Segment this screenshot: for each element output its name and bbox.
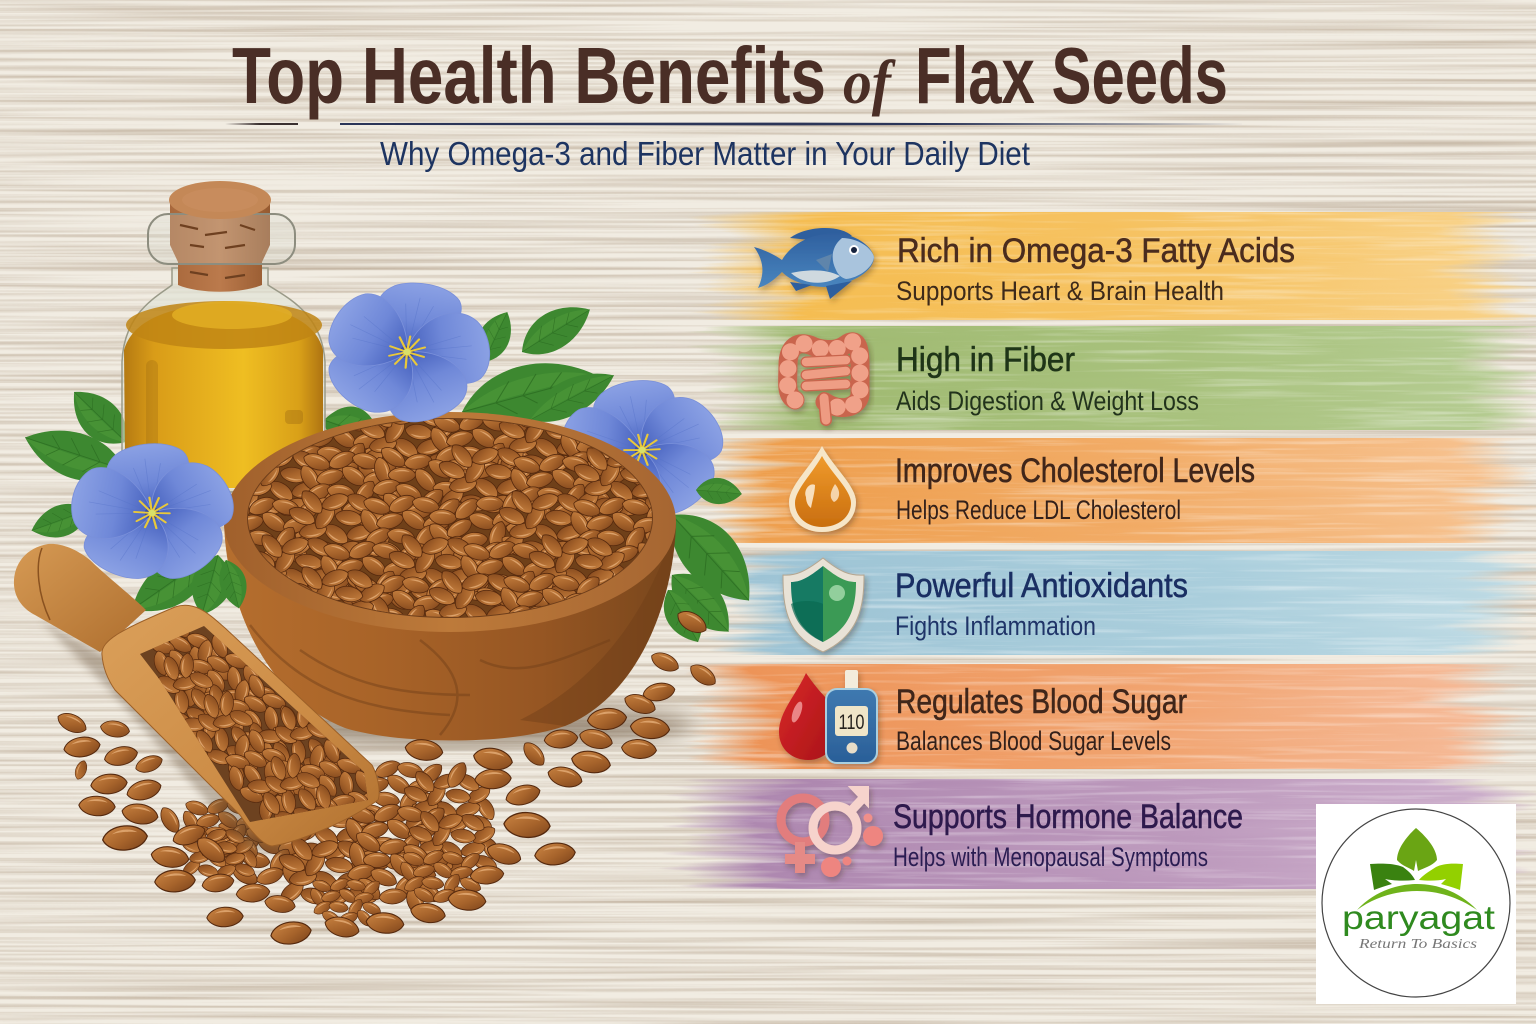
wooden bowl with seeds [217,400,678,741]
icon: fish [754,228,874,299]
subheading: Helps Reduce LDL Cholesterol [896,495,1181,525]
panel: cholesterol [710,438,1515,543]
title: of [843,49,896,117]
flower: top [302,270,512,443]
heading: Improves Cholesterol Levels [895,452,1255,490]
subheading: Aids Digestion & Weight Loss [896,386,1199,416]
heading: Powerful Antioxidants [895,567,1188,605]
logo leaves [1357,828,1477,910]
subtitle: Why Omega-3 and Fiber Matter in Your Daily Diet [380,135,1030,172]
title underline [225,123,1246,125]
subheading: Fights Inflammation [895,611,1096,641]
heading: Supports Hormone Balance [893,798,1243,836]
heading: Rich in Omega-3 Fatty Acids [897,232,1295,270]
panel: blood sugar [695,664,1505,769]
flower: right [538,367,750,542]
leaves: right side [653,476,771,650]
heading: High in Fiber [896,341,1075,379]
logo tagline: Return To Basics [1358,937,1478,952]
panel: hormone balance [685,779,1515,889]
logo wordmark: paryagat [1342,899,1495,936]
icon: intestine [788,342,860,420]
heading: Regulates Blood Sugar [896,683,1187,721]
subheading: Supports Heart & Brain Health [896,276,1224,306]
panel: omega-3 [705,212,1515,320]
leaves behind bottle [18,293,621,546]
icon: blood drop and glucose meter [779,670,877,763]
logo: paryagat [1316,804,1516,1004]
wooden scoop with seeds [14,544,396,856]
title: Flax Seeds [915,31,1228,120]
icon: oil drop [789,446,856,532]
scoop shadow [40,620,290,855]
scattered and piled flax seeds [55,606,720,947]
subheading: Balances Blood Sugar Levels [896,726,1171,756]
meter reading: 110 [838,711,864,734]
icon: shield [783,558,864,652]
illustration: flax products [14,181,771,947]
title: Top Health Benefits [232,31,826,120]
panel: fiber [715,326,1530,430]
oil bottle [122,181,325,492]
icon: gender symbols [781,787,883,877]
flower: left [52,434,255,601]
leaves: lower left [121,538,252,629]
panel: antioxidants [720,551,1525,655]
bowl shadow [245,703,695,747]
subheading: Helps with Menopausal Symptoms [893,842,1208,872]
